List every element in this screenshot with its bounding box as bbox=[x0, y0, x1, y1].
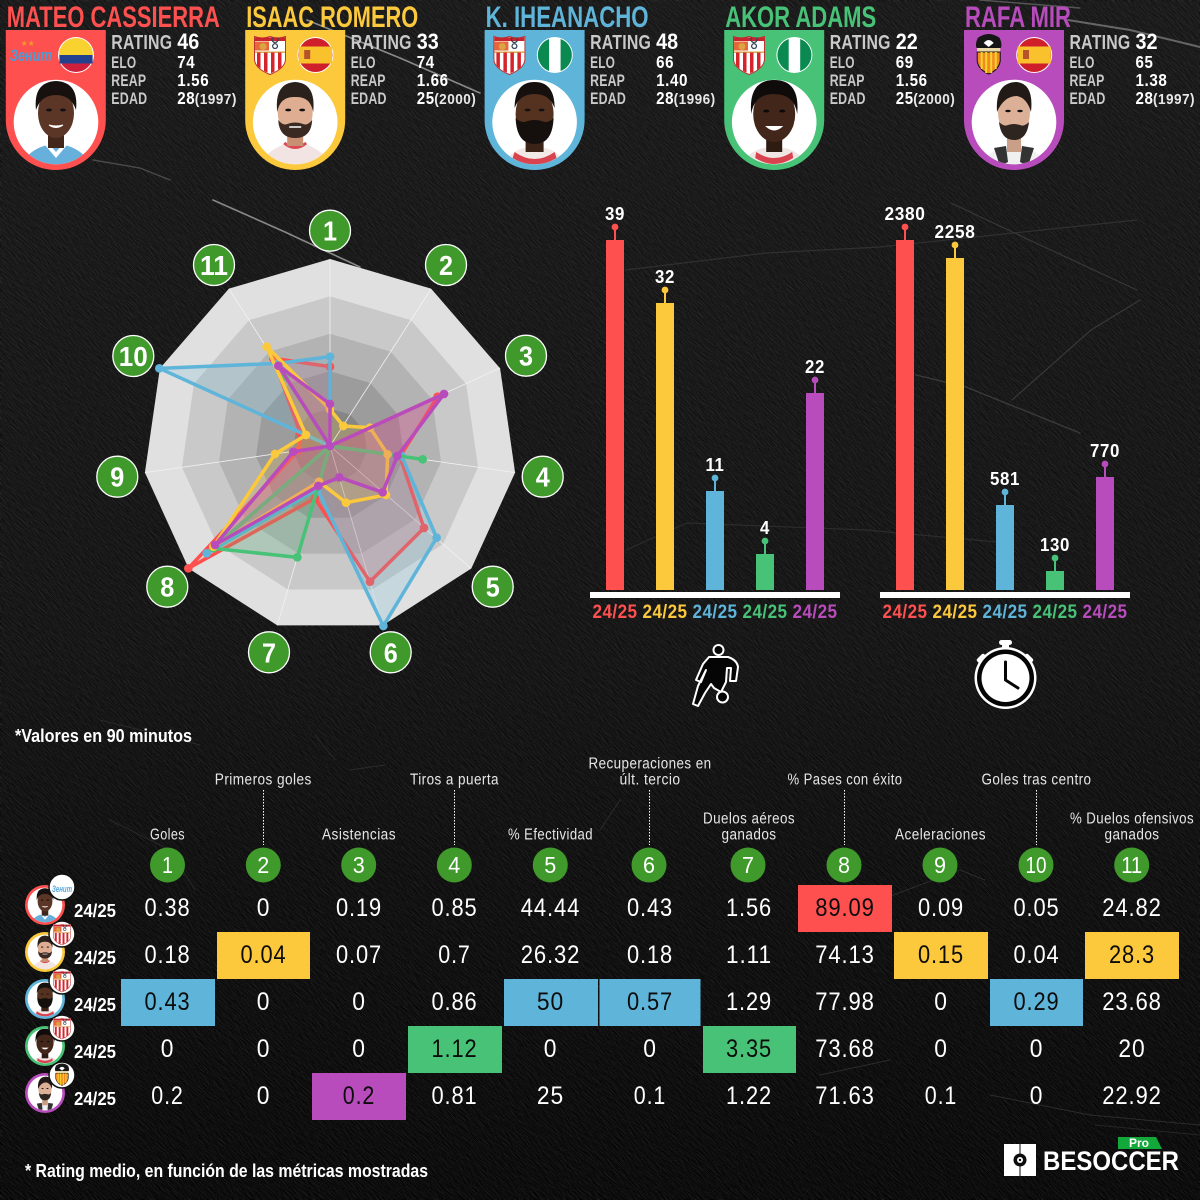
header labels bbox=[150, 756, 1194, 844]
stats: 1.40 bbox=[656, 70, 688, 90]
stats: (1997) bbox=[1153, 91, 1195, 108]
baseline bbox=[880, 592, 1130, 598]
value labels bbox=[884, 203, 1120, 555]
header numbers: 3 bbox=[353, 852, 365, 878]
table row: Mateo Cassierra: 1.56 bbox=[726, 894, 772, 922]
radar axis numbers: 3 bbox=[519, 341, 533, 372]
table row: Rafa Mir: 0.2 bbox=[343, 1082, 375, 1110]
series: K. Iheanacho bbox=[155, 352, 441, 630]
radar chart bbox=[97, 210, 563, 673]
value labels: 39 bbox=[605, 203, 625, 224]
player card: Akor Adams bbox=[724, 1, 955, 170]
header labels: ganados bbox=[722, 826, 776, 844]
radar axis numbers: 2 bbox=[439, 250, 453, 281]
club badge: Zenit: ★★ bbox=[21, 39, 35, 48]
flag: Colombia bbox=[58, 37, 94, 73]
photo bbox=[253, 80, 338, 168]
flag: Nigeria bbox=[776, 37, 812, 73]
stats: RATING bbox=[111, 32, 172, 54]
name: MATEO CASSIERRA bbox=[7, 1, 220, 34]
stats: RATING bbox=[351, 32, 412, 54]
avatar bbox=[25, 874, 75, 925]
table row: K. Iheanacho: 1.29 bbox=[726, 988, 772, 1016]
table row: K. Iheanacho: 0.57 bbox=[627, 988, 673, 1016]
table row: Akor Adams: 0 bbox=[1030, 1035, 1043, 1063]
stats: 25 bbox=[417, 88, 435, 108]
photo bbox=[732, 80, 816, 168]
header numbers: 4 bbox=[448, 852, 460, 878]
table row: K. Iheanacho bbox=[25, 968, 1162, 1019]
table row: Rafa Mir: 1.22 bbox=[726, 1082, 772, 1110]
table row: Akor Adams: 0 bbox=[257, 1035, 270, 1063]
shield bbox=[485, 30, 585, 170]
stats: 32 bbox=[1136, 29, 1158, 54]
photo bbox=[492, 80, 577, 168]
season labels: 24/25 bbox=[1082, 601, 1128, 623]
table row: Rafa Mir: 24/25 bbox=[74, 1089, 116, 1109]
header labels: Asistencias bbox=[322, 826, 396, 844]
footnote: * Rating medio, en función de las métricas mostradas bbox=[25, 1161, 428, 1181]
table row: Isaac Romero: 0.18 bbox=[627, 941, 673, 969]
stats: 25 bbox=[896, 88, 914, 108]
bars bbox=[896, 240, 1114, 590]
header labels: Duelos aéreos bbox=[703, 810, 795, 828]
flag: Spain bbox=[1016, 37, 1052, 73]
table row: Mateo Cassierra: 0 bbox=[257, 894, 270, 922]
avatar bbox=[25, 921, 75, 972]
club badge: Sevilla bbox=[734, 36, 764, 74]
stats: 28 bbox=[177, 88, 195, 108]
stats: (2000) bbox=[434, 91, 476, 108]
table row: Rafa Mir: 0 bbox=[1030, 1082, 1043, 1110]
value labels: 2380 bbox=[884, 203, 926, 224]
value labels: 2258 bbox=[934, 221, 976, 242]
stats: 1.66 bbox=[417, 70, 449, 90]
bar chart: minutos bbox=[880, 203, 1130, 623]
stats: 1.56 bbox=[896, 70, 928, 90]
header numbers: 6 bbox=[643, 852, 655, 878]
stats: 46 bbox=[177, 29, 199, 54]
table row: Akor Adams: 0 bbox=[161, 1035, 174, 1063]
header labels: % Efectividad bbox=[508, 826, 593, 844]
stats bbox=[351, 29, 476, 108]
value labels: 581 bbox=[990, 468, 1020, 489]
series: Akor Adams bbox=[209, 372, 427, 562]
stats: 33 bbox=[417, 29, 439, 54]
stats: (1997) bbox=[195, 91, 237, 108]
header labels: Tiros a puerta bbox=[410, 772, 499, 788]
table row: Isaac Romero: 74.13 bbox=[815, 941, 875, 969]
season labels: 24/25 bbox=[592, 601, 638, 623]
shield bbox=[6, 30, 106, 170]
shield bbox=[245, 30, 345, 170]
radar series bbox=[155, 342, 448, 630]
stats: 74 bbox=[417, 52, 435, 72]
stats: REAP bbox=[111, 71, 146, 90]
series: Mateo Cassierra bbox=[184, 354, 442, 586]
header numbers: 1 bbox=[162, 852, 173, 878]
stats: REAP bbox=[830, 71, 865, 90]
stats: REAP bbox=[1070, 71, 1104, 90]
stats: 1.38 bbox=[1136, 70, 1168, 90]
table row: Mateo Cassierra: 0.43 bbox=[627, 894, 673, 922]
avatar: Зенит bbox=[52, 884, 72, 894]
table row: Rafa Mir: 0 bbox=[257, 1082, 270, 1110]
table row: Akor Adams: 73.68 bbox=[815, 1035, 875, 1063]
table row: Isaac Romero: 1.11 bbox=[726, 941, 772, 969]
header numbers: 9 bbox=[934, 852, 946, 878]
table row: Akor Adams: 3.35 bbox=[726, 1035, 772, 1063]
logo: BeSoccer Pro: Pro bbox=[1129, 1138, 1149, 1150]
table row: K. Iheanacho: 0.29 bbox=[1014, 988, 1060, 1016]
header numbers: 2 bbox=[257, 852, 269, 878]
series: Isaac Romero bbox=[209, 342, 392, 551]
table row: Isaac Romero: 24/25 bbox=[74, 948, 116, 968]
table row: K. Iheanacho: 0.43 bbox=[144, 988, 190, 1016]
stats: (2000) bbox=[913, 91, 955, 108]
table row: Akor Adams: 0 bbox=[352, 1035, 366, 1063]
stats: REAP bbox=[351, 71, 386, 90]
season labels: 24/25 bbox=[1032, 601, 1078, 623]
avatar bbox=[25, 1062, 75, 1113]
table row: Rafa Mir: 0.1 bbox=[925, 1082, 957, 1110]
radar grid bbox=[145, 259, 515, 625]
radar axis numbers: 9 bbox=[110, 462, 124, 493]
table row: Rafa Mir: 0.1 bbox=[634, 1082, 666, 1110]
header labels: % Pases con éxito bbox=[788, 772, 902, 788]
photo bbox=[14, 80, 98, 168]
stats: EDAD bbox=[351, 89, 387, 108]
table row: Rafa Mir bbox=[25, 1062, 1162, 1113]
table row: Mateo Cassierra: 24/25 bbox=[74, 901, 116, 921]
avatar bbox=[25, 968, 75, 1019]
header numbers: 7 bbox=[742, 852, 754, 878]
table row: K. Iheanacho: 24/25 bbox=[74, 995, 116, 1015]
player card: K. Iheanacho bbox=[485, 1, 716, 170]
radar axis numbers: 5 bbox=[486, 572, 500, 603]
radar axis numbers: 8 bbox=[160, 572, 174, 603]
stats: ELO bbox=[830, 53, 855, 72]
baseline bbox=[590, 592, 840, 598]
value labels: 130 bbox=[1040, 534, 1070, 555]
table row: Isaac Romero: 26.32 bbox=[521, 941, 580, 969]
table row: Mateo Cassierra: 24.82 bbox=[1102, 894, 1162, 922]
stats: 48 bbox=[656, 29, 678, 54]
header labels: Recuperaciones en bbox=[588, 756, 712, 772]
season labels bbox=[592, 601, 838, 623]
stats: 22 bbox=[896, 29, 918, 54]
table row: K. Iheanacho: 0 bbox=[352, 988, 366, 1016]
series: Rafa Mir bbox=[211, 361, 448, 549]
table row: Rafa Mir: 71.63 bbox=[815, 1082, 875, 1110]
player card: Mateo Cassierra bbox=[6, 1, 237, 170]
club badge: Valencia bbox=[976, 34, 1002, 74]
icon: player dribbling bbox=[693, 645, 738, 706]
value labels bbox=[605, 203, 825, 538]
club badge: Zenit bbox=[10, 39, 52, 65]
pins bbox=[612, 224, 818, 554]
shield bbox=[724, 30, 824, 170]
season labels: 24/25 bbox=[882, 601, 928, 623]
stats: 74 bbox=[177, 52, 195, 72]
table row: K. Iheanacho: 77.98 bbox=[815, 988, 875, 1016]
header numbers: 8 bbox=[838, 852, 850, 878]
header labels: ganados bbox=[1104, 826, 1160, 844]
table highlighted cells bbox=[121, 885, 1179, 1120]
table row: Isaac Romero bbox=[25, 921, 1155, 972]
season labels: 24/25 bbox=[982, 601, 1028, 623]
logo: BeSoccer Pro bbox=[1004, 1137, 1179, 1176]
logo: BeSoccer Pro: BESOCCER bbox=[1043, 1146, 1179, 1176]
table row: Isaac Romero: 0.7 bbox=[438, 941, 471, 969]
header labels: Goles tras centro bbox=[982, 772, 1092, 788]
stats: 65 bbox=[1136, 52, 1154, 72]
season labels: 24/25 bbox=[692, 601, 738, 623]
stats: EDAD bbox=[111, 89, 147, 108]
season labels: 24/25 bbox=[792, 601, 838, 623]
stats: EDAD bbox=[1070, 89, 1106, 108]
bar chart: partidos bbox=[590, 203, 840, 623]
stats: ELO bbox=[590, 53, 615, 72]
table row: K. Iheanacho: 23.68 bbox=[1102, 988, 1162, 1016]
table row: Isaac Romero: 0.04 bbox=[240, 941, 286, 969]
table row: K. Iheanacho: 0 bbox=[257, 988, 270, 1016]
radar axis numbers: 11 bbox=[200, 250, 228, 281]
player card: Isaac Romero bbox=[245, 1, 476, 170]
table row: K. Iheanacho: 0 bbox=[934, 988, 948, 1016]
season labels bbox=[882, 601, 1128, 623]
stats: RATING bbox=[830, 32, 891, 54]
table row: Akor Adams: 0 bbox=[544, 1035, 557, 1063]
table headers bbox=[150, 756, 1194, 882]
table row: Akor Adams: 1.12 bbox=[432, 1035, 478, 1063]
name: ISAAC ROMERO bbox=[246, 1, 418, 34]
stats: 66 bbox=[656, 52, 674, 72]
table row: Isaac Romero: 0.18 bbox=[144, 941, 190, 969]
table row: Mateo Cassierra: 0.38 bbox=[144, 894, 190, 922]
table row: Rafa Mir: 22.92 bbox=[1102, 1082, 1162, 1110]
stats bbox=[111, 29, 237, 108]
radar axis numbers: 1 bbox=[323, 216, 337, 247]
value labels: 32 bbox=[655, 266, 675, 287]
table row: Akor Adams bbox=[25, 1015, 1146, 1066]
table row: Mateo Cassierra: 0.09 bbox=[918, 894, 964, 922]
radar axis numbers: 7 bbox=[262, 637, 276, 668]
stats: ELO bbox=[111, 53, 136, 72]
table row: Isaac Romero: 28.3 bbox=[1109, 941, 1155, 969]
stats bbox=[590, 29, 716, 108]
stats bbox=[1070, 29, 1195, 108]
club badge: Zenit: Зенит bbox=[10, 46, 52, 65]
table row: Akor Adams: 20 bbox=[1118, 1035, 1146, 1063]
stats: ELO bbox=[351, 53, 376, 72]
value labels: 770 bbox=[1090, 440, 1120, 461]
stats: EDAD bbox=[830, 89, 866, 108]
table row: Akor Adams: 24/25 bbox=[74, 1042, 116, 1062]
header labels: Goles bbox=[150, 826, 185, 844]
stats: ELO bbox=[1070, 53, 1094, 72]
flag: Spain bbox=[297, 37, 333, 73]
stats: 69 bbox=[896, 52, 914, 72]
stats: 28 bbox=[656, 88, 674, 108]
table row: Rafa Mir: 0.81 bbox=[432, 1082, 478, 1110]
radar axis numbers: 4 bbox=[536, 462, 550, 493]
stats: EDAD bbox=[590, 89, 626, 108]
name: AKOR ADAMS bbox=[725, 1, 876, 34]
table row: Mateo Cassierra bbox=[25, 874, 1162, 925]
table row: Rafa Mir: 25 bbox=[537, 1082, 564, 1110]
table row: Mateo Cassierra: 44.44 bbox=[521, 894, 580, 922]
value labels: 11 bbox=[706, 454, 724, 475]
radar axis numbers bbox=[97, 210, 563, 673]
club badge: Sevilla bbox=[254, 36, 286, 74]
header labels: Aceleraciones bbox=[895, 826, 986, 844]
table row: Mateo Cassierra: 0.05 bbox=[1014, 894, 1060, 922]
stats: REAP bbox=[590, 71, 625, 90]
table row: Isaac Romero: 0.04 bbox=[1014, 941, 1060, 969]
stats bbox=[830, 29, 955, 108]
table row: Isaac Romero: 0.15 bbox=[918, 941, 964, 969]
stats: RATING bbox=[590, 32, 651, 54]
season labels: 24/25 bbox=[932, 601, 978, 623]
bars bbox=[606, 240, 824, 590]
radar axis numbers: 10 bbox=[119, 341, 148, 372]
name: K. IHEANACHO bbox=[486, 1, 649, 34]
player card: Rafa Mir bbox=[964, 1, 1195, 170]
header numbers: 11 bbox=[1121, 852, 1142, 878]
shield bbox=[964, 30, 1064, 170]
header labels: Primeros goles bbox=[215, 772, 312, 788]
stats: (1996) bbox=[674, 91, 716, 108]
table row: Isaac Romero: 0.07 bbox=[336, 941, 382, 969]
pins bbox=[902, 224, 1108, 571]
table row: K. Iheanacho: 0.86 bbox=[432, 988, 478, 1016]
season labels: 24/25 bbox=[742, 601, 788, 623]
club badge: Sevilla bbox=[494, 36, 525, 74]
table row: Akor Adams: 0 bbox=[643, 1035, 657, 1063]
table row: Akor Adams: 0 bbox=[934, 1035, 948, 1063]
value labels: 4 bbox=[760, 517, 770, 538]
icon: stopwatch bbox=[974, 640, 1036, 709]
radar axis numbers: 6 bbox=[384, 637, 398, 668]
header numbers: 5 bbox=[544, 852, 556, 878]
table row: Mateo Cassierra: 0.85 bbox=[432, 894, 478, 922]
header numbers: 10 bbox=[1026, 852, 1046, 878]
note: valores en 90 minutos: *Valores en 90 minutos bbox=[15, 726, 192, 746]
header numbers bbox=[150, 848, 1149, 882]
stats: 28 bbox=[1136, 88, 1154, 108]
table row: Rafa Mir: 0.2 bbox=[151, 1082, 184, 1110]
stats: 1.56 bbox=[177, 70, 209, 90]
table row: Mateo Cassierra: 89.09 bbox=[815, 894, 875, 922]
season labels: 24/25 bbox=[642, 601, 688, 623]
header labels: últ. tercio bbox=[620, 772, 680, 788]
table row: Mateo Cassierra: 0.19 bbox=[336, 894, 382, 922]
value labels: 22 bbox=[805, 356, 825, 377]
flag: Nigeria bbox=[537, 37, 573, 73]
name: RAFA MIR bbox=[965, 1, 1071, 34]
table row: K. Iheanacho: 50 bbox=[537, 988, 564, 1016]
avatar bbox=[25, 1015, 75, 1066]
photo bbox=[972, 80, 1056, 168]
stats: RATING bbox=[1070, 32, 1130, 54]
